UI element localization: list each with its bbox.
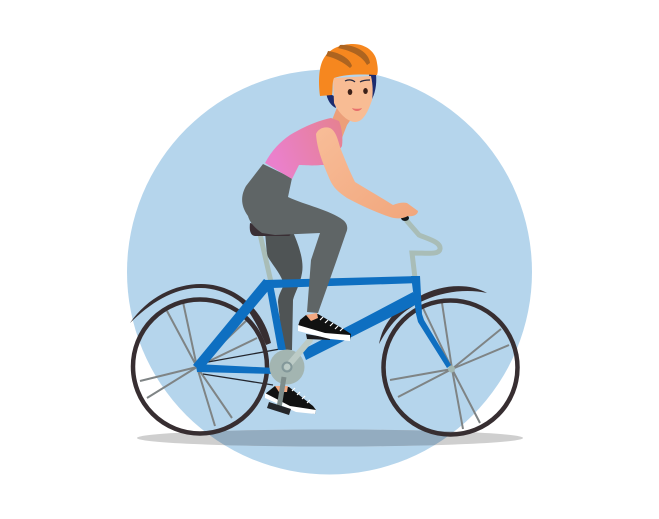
far shoe bbox=[265, 386, 316, 414]
handlebar grip bbox=[401, 215, 409, 221]
upper pedal bbox=[306, 334, 330, 340]
front fender bbox=[379, 286, 487, 344]
crank centre bbox=[282, 362, 292, 372]
spokes bbox=[140, 302, 257, 426]
far leg bbox=[265, 232, 303, 350]
helmet bbox=[319, 44, 378, 96]
hair back bbox=[326, 92, 336, 108]
seat stay bbox=[193, 279, 273, 371]
near shoe bbox=[298, 313, 351, 341]
seat tube bbox=[266, 284, 286, 350]
shirt bbox=[265, 118, 342, 179]
hub bbox=[448, 366, 455, 372]
ground shadow bbox=[137, 430, 523, 446]
tyre bbox=[384, 300, 518, 434]
face bbox=[333, 76, 373, 122]
crank arm down bbox=[279, 377, 284, 408]
eyes and eyebrows bbox=[345, 80, 370, 95]
saddle bbox=[250, 223, 290, 236]
illustration: cyclist bbox=[127, 44, 532, 474]
helmet vents bbox=[326, 51, 352, 68]
bicycle frame bbox=[193, 276, 451, 374]
hair right bbox=[369, 74, 376, 101]
rear wheel bbox=[133, 300, 280, 434]
handlebar bbox=[406, 220, 440, 278]
crank disc bbox=[270, 350, 304, 384]
background circle bbox=[127, 70, 532, 474]
arm bbox=[316, 127, 418, 218]
rear fender bbox=[130, 284, 271, 345]
front wheel bbox=[384, 300, 518, 434]
black spokes bbox=[203, 349, 280, 385]
seat post bbox=[260, 234, 271, 282]
lower pedal bbox=[267, 402, 291, 415]
mouth bbox=[352, 108, 362, 111]
chain stay bbox=[196, 364, 276, 374]
near leg bbox=[242, 164, 347, 313]
tyre bbox=[133, 300, 267, 434]
top tube bbox=[264, 276, 420, 288]
neck bbox=[332, 105, 356, 138]
down tube bbox=[302, 292, 417, 360]
crank arm up bbox=[287, 340, 310, 367]
spokes bbox=[390, 303, 509, 429]
head tube and fork bbox=[411, 276, 451, 368]
